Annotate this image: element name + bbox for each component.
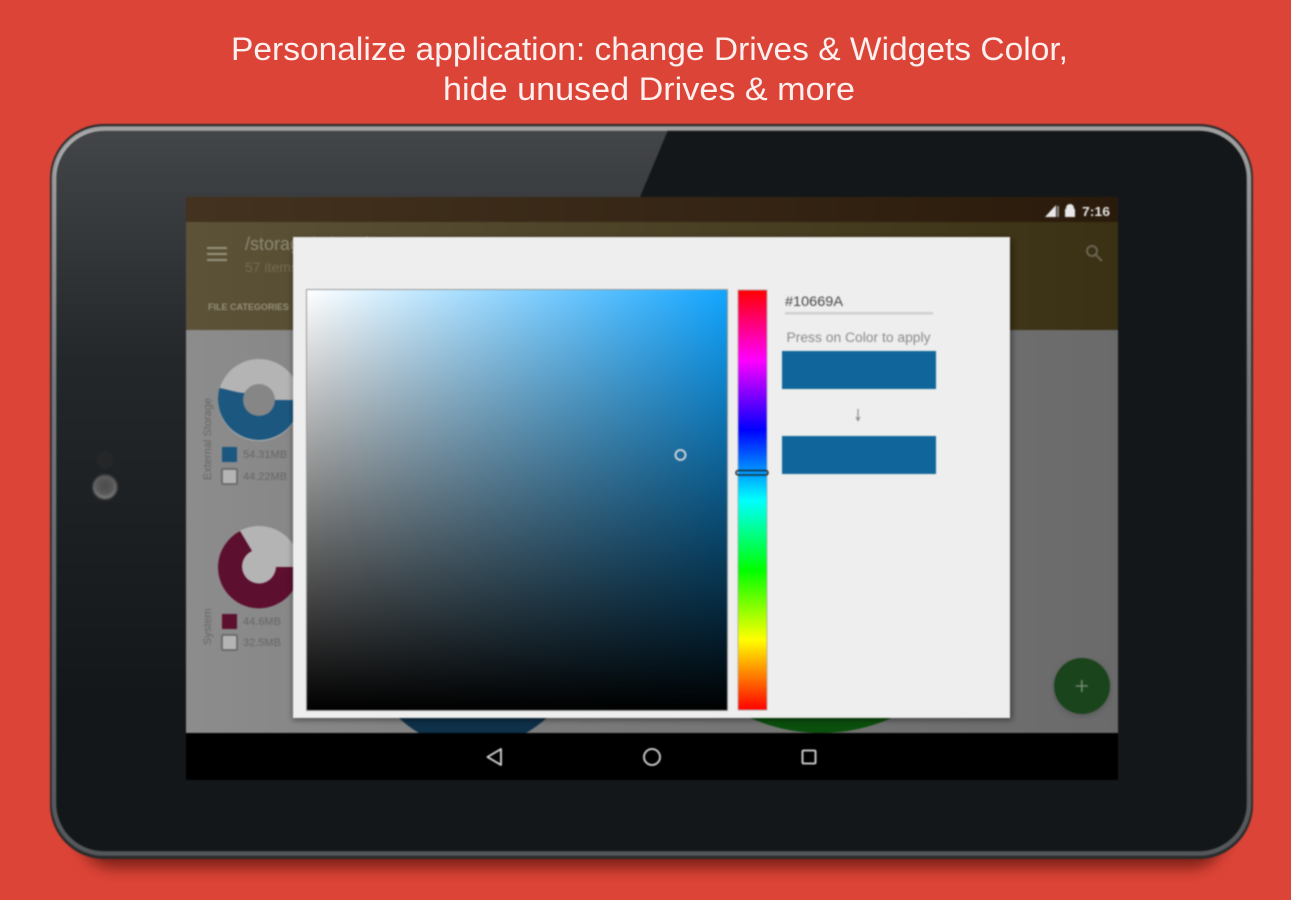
glass reflection bbox=[55, 130, 668, 524]
hex input underline bbox=[785, 312, 933, 314]
floating action button bbox=[1054, 658, 1110, 716]
device outer edge bbox=[50, 124, 1253, 859]
content area bbox=[186, 330, 1118, 733]
legend: system bbox=[202, 608, 281, 650]
navigation bar bbox=[186, 733, 1118, 780]
status icons bbox=[1045, 204, 1110, 219]
status bar bbox=[186, 197, 1118, 222]
app toolbar bbox=[186, 222, 1118, 330]
legend: external storage: 54.31MB bbox=[243, 449, 287, 461]
toolbar item count: 57 items bbox=[245, 259, 298, 275]
saturation value square bbox=[306, 289, 728, 711]
new color swatch bbox=[782, 436, 936, 474]
donut remnant: blue bbox=[397, 716, 549, 733]
camera bbox=[93, 451, 117, 499]
clock: 7:16 bbox=[1082, 204, 1110, 219]
hue slider bbox=[736, 290, 768, 710]
device screen bbox=[186, 197, 1118, 780]
arrow bbox=[856, 409, 860, 420]
home button bbox=[644, 749, 660, 765]
legend: external storage: External Storage bbox=[202, 398, 214, 480]
tablet device bbox=[50, 124, 1253, 868]
donut: external storage bbox=[218, 359, 300, 441]
hue marker bbox=[736, 470, 768, 475]
device shadow bbox=[80, 800, 1225, 868]
signal icon bbox=[1045, 205, 1056, 217]
file categories tab: FILE CATEGORIES bbox=[208, 302, 289, 312]
donut: system bbox=[218, 526, 300, 608]
recents button bbox=[802, 750, 816, 764]
legend: external storage bbox=[202, 398, 287, 484]
menu icon bbox=[207, 247, 227, 261]
lock icon bbox=[1065, 204, 1075, 217]
legend: system: 44.6MB bbox=[243, 616, 281, 628]
title bbox=[231, 31, 1068, 107]
instruction text: Press on Color to apply bbox=[786, 330, 931, 345]
donut remnant: green bbox=[746, 716, 896, 733]
old color swatch bbox=[782, 351, 936, 389]
legend: system: System bbox=[202, 608, 214, 645]
legend: system: 32.5MB bbox=[243, 637, 281, 649]
title: hide unused Drives & more bbox=[443, 71, 855, 107]
toolbar path: /storage/sdcard bbox=[245, 234, 369, 254]
back button bbox=[488, 749, 501, 765]
color selector ring bbox=[676, 450, 686, 460]
search icon bbox=[1087, 246, 1102, 261]
device frame bbox=[54, 128, 1249, 854]
title: Personalize application: change Drives & Widgets Color, bbox=[231, 31, 1068, 67]
legend: external storage: 44.22MB bbox=[243, 471, 287, 483]
hex value: #10669A bbox=[785, 294, 843, 309]
color picker dialog bbox=[293, 237, 1012, 720]
